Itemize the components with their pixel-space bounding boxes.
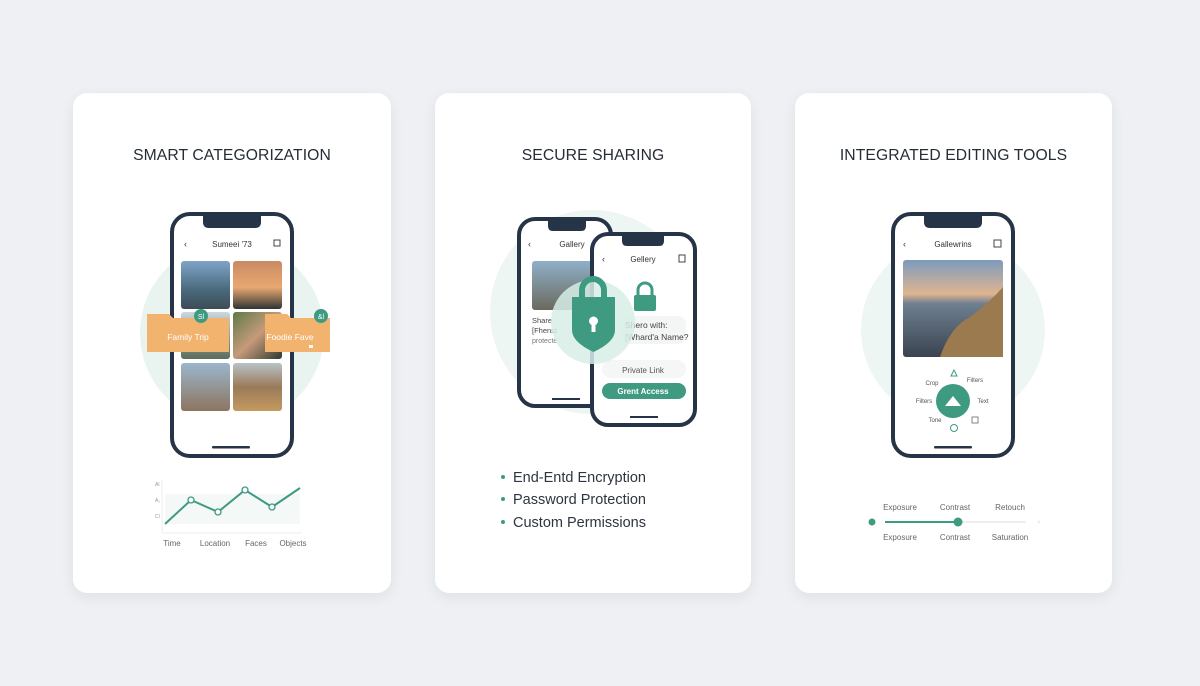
chart: categorization line chart: Time	[163, 539, 181, 548]
radial edit menu: Text	[977, 399, 989, 405]
chart: categorization line chart: Cl	[155, 514, 160, 520]
folder: family trip: Family Trip	[167, 332, 209, 342]
illustration: sharing phones with lock: Private Link	[622, 366, 665, 375]
folder: family trip: Sl	[198, 314, 205, 321]
illustration: categorization phone	[140, 214, 330, 456]
chart: categorization line chart: Al	[155, 482, 159, 488]
illustration: sharing phones with lock: Gellery	[630, 255, 656, 264]
folder: family trip	[147, 309, 229, 352]
slider: adjustments: Exposure	[883, 503, 917, 512]
heading: integrated editing tools: INTEGRATED EDITING TOOLS	[840, 147, 1067, 164]
slider: adjustments: Saturation	[992, 533, 1028, 542]
panel: smart categorization	[73, 93, 391, 593]
illustration: sharing phones with lock: Gallery	[559, 240, 585, 249]
illustration: sharing phones with lock: ‹	[528, 239, 531, 249]
illustration: sharing phones with lock: [Whard'a Name?	[625, 332, 689, 342]
illustration: categorization phone: Sumeei '73	[212, 240, 252, 249]
radial edit menu: Filters	[916, 399, 932, 405]
heading: smart categorization: SMART CATEGORIZATION	[133, 147, 331, 164]
chart: categorization line chart: Objects	[279, 539, 307, 548]
illustration: sharing phones with lock: ‹	[602, 254, 605, 264]
illustration: sharing phones with lock: Shero with:	[625, 320, 668, 330]
illustration: editing phone: Gallewrins	[934, 240, 972, 249]
list: security features: Password Protection	[513, 492, 646, 508]
panel: integrated editing tools	[795, 93, 1112, 593]
chart: categorization line chart: A₁	[155, 498, 160, 504]
illustration: categorization phone: ‹	[184, 239, 187, 249]
folder: foodie fave: &l	[318, 314, 325, 321]
slider: adjustments: Contrast	[940, 533, 971, 542]
radial edit menu: Filters	[967, 378, 983, 384]
slider: adjustments	[868, 503, 1040, 542]
panel: secure sharing	[435, 93, 751, 593]
folder: foodie fave	[265, 309, 330, 352]
heading: secure sharing: SECURE SHARING	[522, 147, 664, 164]
list: security features: Custom Permissions	[513, 515, 646, 531]
list: security features	[501, 470, 646, 531]
radial edit menu: Tone	[928, 418, 942, 424]
slider: adjustments: Retouch	[995, 503, 1025, 512]
illustration: sharing phones with lock	[490, 210, 695, 425]
chart: categorization line chart: Faces	[245, 539, 267, 548]
chart: categorization line chart	[155, 480, 307, 548]
slider: adjustments: Exposure	[883, 533, 917, 542]
illustration: sharing phones with lock: Share	[532, 316, 552, 325]
chart: categorization line chart: Location	[200, 539, 230, 548]
icon: shield lock	[551, 279, 635, 364]
illustration: editing phone: ‹	[903, 239, 906, 249]
folder: foodie fave: Foodie Fave	[266, 332, 314, 342]
radial edit menu	[916, 370, 989, 432]
list: security features: End-Entd Encryption	[513, 470, 646, 486]
radial edit menu: Crop	[925, 381, 939, 387]
illustration: sharing phones with lock: Grent Access	[617, 387, 669, 396]
illustration: sharing phones with lock: protecte	[532, 338, 557, 345]
illustration: sharing phones with lock: [Fhenst	[532, 326, 558, 335]
illustration: editing phone	[861, 214, 1045, 456]
slider: adjustments: Contrast	[940, 503, 971, 512]
